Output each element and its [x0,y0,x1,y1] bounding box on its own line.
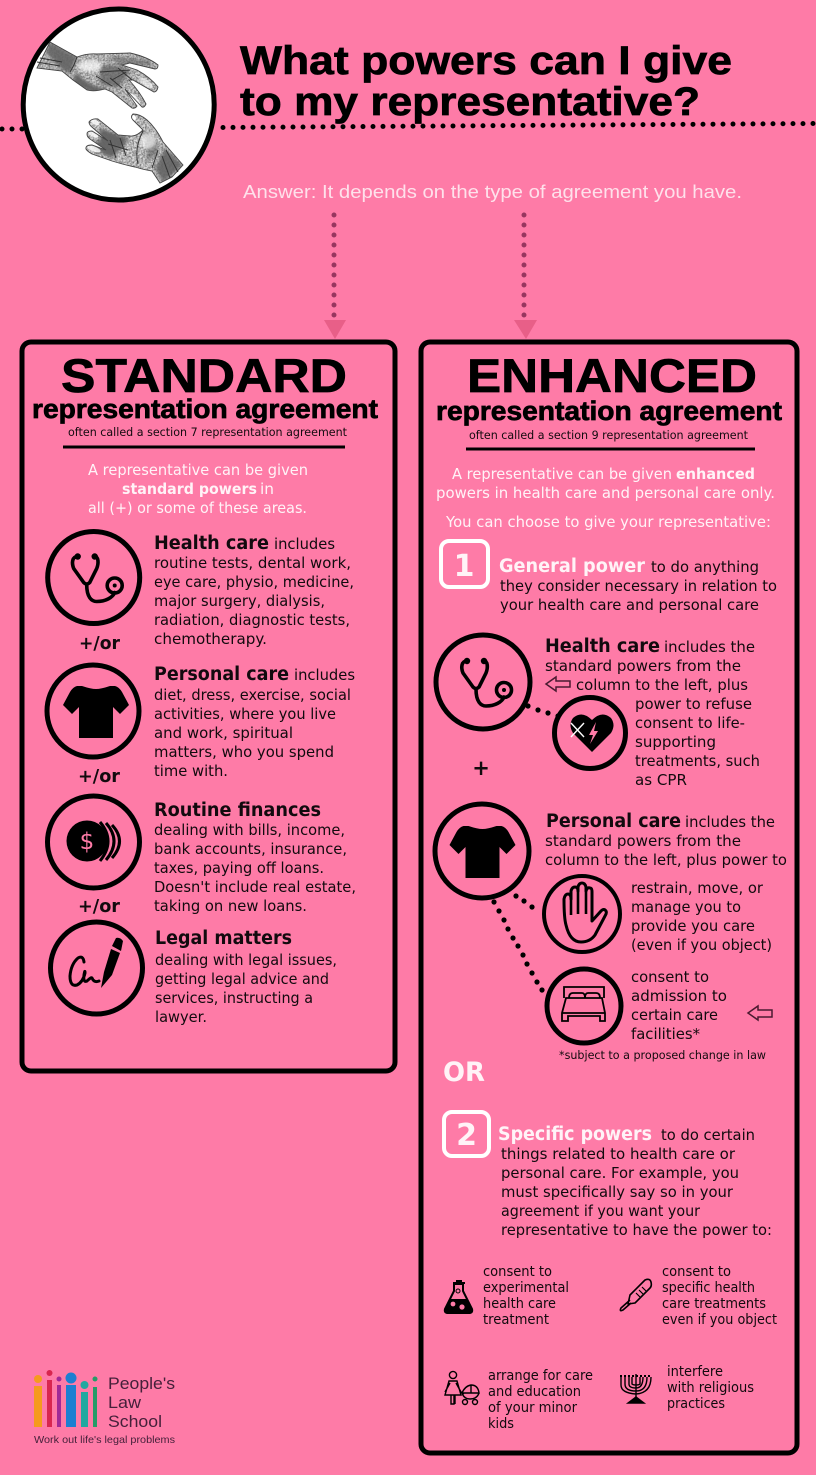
heading: standard: STANDARD [61,349,347,402]
badge: 1 [441,541,488,587]
note: section 9: often called a section 9 representation agreement [469,428,748,442]
text: personal care: activities, where you live [154,705,336,723]
icon: thermometer [620,1279,651,1311]
text: specific powers: personal care. For example, you [501,1164,739,1182]
label: +/or: +/or [79,634,120,654]
text: experimental treatment: experimental [483,1280,569,1296]
text: specific treatments: consent to [662,1264,731,1280]
text: health care [154,533,354,648]
text: admission: facilities* [631,1025,700,1043]
text: enhanced health care: standard powers from the [545,657,741,675]
label: or: OR [443,1057,485,1088]
text: enhanced personal care: standard powers from the [545,832,741,850]
text: personal care: includes [294,666,355,684]
text: legal matters: Legal matters [155,928,292,949]
icon: raised hand [544,876,620,952]
arrow: to enhanced [514,215,537,339]
text: specific treatments: even if you object [662,1312,777,1328]
text: religious practices: with religious [667,1380,754,1396]
text: enhanced health care: supporting [635,733,716,751]
logo: People's Law School: People's [108,1374,175,1393]
text: specific powers: agreement if you want your [501,1202,701,1220]
title [240,39,732,124]
text: restrain: provide you care [631,917,755,935]
text: legal matters: services, instructing a [155,989,313,1007]
icon: stethoscope [436,635,530,729]
icon: stethoscope [48,532,140,624]
text: religious practices [667,1364,754,1412]
text: specific treatments: care treatments [662,1296,766,1312]
icon: signature and pen [50,922,142,1014]
text: experimental treatment [483,1264,569,1328]
text: health care: includes [274,535,335,553]
text: enhanced health care: as CPR [635,771,687,789]
text: care for kids: of your minor [488,1400,577,1416]
text: general power: they consider necessary in relation to [500,577,777,595]
icon: bed [547,969,621,1043]
text: restrain: (even if you object) [631,936,772,954]
logo: People's Law School [34,1370,175,1446]
icon: t-shirt [47,665,139,757]
badge: 2 [444,1112,489,1156]
badge: 1: 1 [454,549,474,584]
text: specific powers: to do certain [661,1126,755,1144]
text: restrain [631,879,772,954]
text: routine finances [154,800,356,915]
text: enhanced personal care: column to the left, plus power to [545,851,787,869]
text: experimental treatment: health care [483,1296,556,1312]
icon: heart [554,698,626,768]
text: routine finances: taxes, paying off loans. [154,859,324,877]
intro text: You can choose to give your representative: [445,513,771,531]
connector dots [525,703,561,719]
text: enhanced personal care: Personal care [546,811,681,832]
text: religious practices: interfere [667,1364,723,1380]
text: restrain: manage you to [631,898,741,916]
dotted header line [2,124,816,129]
badge: 2: 2 [456,1118,477,1153]
arrow: left [546,677,570,691]
text: enhanced health care: column to the left, plus [576,676,748,694]
text: enhanced health care [545,636,760,789]
text: enhanced health care: includes the [664,638,755,656]
note: section 7: often called a section 7 representation agreement [68,425,347,439]
text: health care: Health care [154,533,269,554]
text: routine finances: dealing with bills, income, [154,821,345,839]
text: general power: General power [499,556,646,577]
text: legal matters [155,928,337,1026]
intro text: A representative can be given [452,465,672,483]
intro text: in [260,480,274,498]
text: enhanced health care: treatments, such [635,752,760,770]
icon: menorah [620,1374,652,1403]
lower hand [85,114,184,184]
text: specific powers: representative to have the power to: [501,1221,772,1239]
icon: t-shirt [435,804,529,898]
text: restrain: restrain, move, or [631,879,764,897]
intro text: all (+) or some of these areas. [88,499,307,517]
hands illustration in circle [23,9,214,200]
text: routine finances: Routine finances [154,800,321,821]
icon: coins: $ [80,829,94,855]
logo: People's Law School: School [108,1412,162,1431]
text: care for kids: kids [488,1416,514,1432]
icon: flask [445,1281,472,1313]
intro text: enhanced [676,465,755,483]
text: health care: radiation, diagnostic tests, [154,611,350,629]
text: admission: certain care [631,1006,718,1024]
title: What powers can I give [240,39,732,83]
panel: enhanced agreement [421,342,797,1453]
logo: People's Law School: Work out life's legal problems [34,1434,175,1446]
text: care for kids [488,1368,593,1432]
label: +/or: +/or [78,767,120,787]
title: to my representative? [240,80,700,124]
arrow: left [748,1006,772,1020]
text: specific treatments: specific health [662,1280,755,1296]
text: enhanced health care: consent to life- [635,714,745,732]
text: legal matters: lawyer. [155,1008,207,1026]
text: religious practices: practices [667,1396,725,1412]
logo: People's Law School: Law [108,1393,142,1412]
subheading: representation agreement: representation agreement [32,394,378,424]
answer line: Answer: It depends on the type of agreement you have. [243,181,742,202]
text: personal care: Personal care [154,664,289,685]
text: legal matters: getting legal advice and [155,970,329,988]
footnote: *subject to a proposed change in law [559,1048,766,1062]
text: admission [631,968,727,1043]
intro text [88,461,308,517]
text: enhanced personal care: includes the [685,813,775,831]
text: routine finances: Doesn't include real estate, [154,878,356,896]
label: +/or: +/or [78,897,120,917]
text: personal care: time with. [154,762,228,780]
subheading: representation agreement: representation agreement [436,396,782,426]
text: general power [499,556,777,614]
icon: parent with stroller [445,1371,479,1404]
intro text [436,465,775,531]
upper hand [36,42,158,109]
text: health care: routine tests, dental work, [154,554,351,572]
label: plus: + [472,756,490,780]
text: routine finances: bank accounts, insurance, [154,840,347,858]
text: specific powers: must specifically say so in your [501,1183,734,1201]
text: specific powers: things related to health care or [501,1145,736,1163]
intro text: powers in health care and personal care only. [436,484,775,502]
text: specific powers: Specific powers [498,1124,652,1145]
text: personal care [154,664,355,780]
heading: enhanced: ENHANCED [467,349,757,402]
text: general power: your health care and personal care [500,596,759,614]
text: health care: major surgery, dialysis, [154,592,325,610]
text: enhanced health care: power to refuse [635,695,752,713]
text: experimental treatment: treatment [483,1312,549,1328]
text: health care: eye care, physio, medicine, [154,573,354,591]
text: specific powers [498,1124,772,1239]
text: health care: chemotherapy. [154,630,267,648]
text: personal care: and work, spiritual [154,724,293,742]
text: admission: consent to [631,968,709,986]
intro text: A representative can be given [88,461,308,479]
icon: coins [48,796,140,888]
text: experimental treatment: consent to [483,1264,552,1280]
text: care for kids: and education [488,1384,581,1400]
text: specific treatments [662,1264,777,1328]
text: care for kids: arrange for care [488,1368,593,1384]
text: legal matters: dealing with legal issues, [155,951,337,969]
text: enhanced personal care [545,811,787,869]
text: personal care: diet, dress, exercise, social [154,686,351,704]
connector dots [491,893,545,993]
panel: standard agreement [22,342,395,1071]
text: personal care: matters, who you spend [154,743,334,761]
text: enhanced health care: Health care [545,636,660,657]
text: admission: admission to [631,987,727,1005]
text: routine finances: taking on new loans. [154,897,307,915]
text: general power: to do anything [651,558,759,576]
arrow: to standard [324,215,346,339]
intro text: standard powers [122,480,257,498]
